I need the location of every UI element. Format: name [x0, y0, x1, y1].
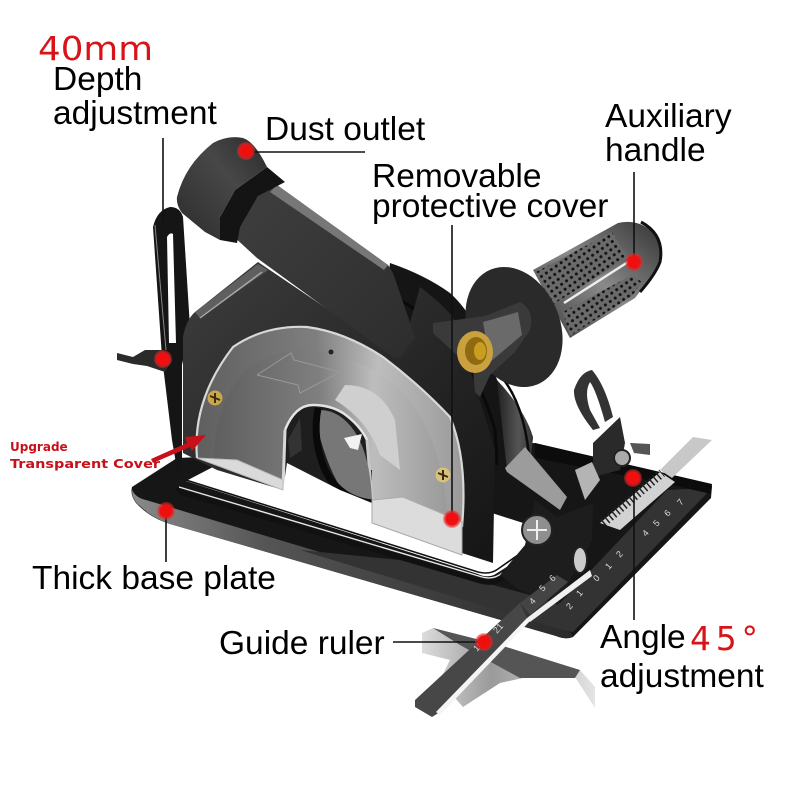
steel slider	[505, 447, 567, 510]
ruler numbers: 7	[675, 497, 686, 507]
ruler numbers: 21	[491, 621, 505, 635]
label: auxiliary handle: Auxiliary	[605, 98, 732, 135]
inner wheel ring	[318, 410, 372, 500]
label: dust outlet: Dust outlet	[265, 111, 426, 148]
label: thick base plate: Thick base plate	[32, 560, 276, 597]
label: angle adjustment: Angle	[600, 619, 686, 656]
auxiliary handle	[433, 222, 662, 402]
label: angle adjustment: adjustment	[600, 658, 765, 695]
label: depth adjustment: adjustment	[53, 95, 218, 132]
label: removable protective cover: Removable	[372, 158, 541, 195]
label: 45 degrees: 45°	[690, 619, 758, 658]
transparent cover	[196, 327, 463, 555]
ruler numbers: 6	[662, 508, 673, 518]
protective cover housing	[183, 262, 495, 563]
label: upgrade transparent cover: Transparent Cover	[10, 457, 160, 471]
dust outlet tube	[177, 137, 415, 358]
ruler numbers: 5	[537, 583, 548, 593]
white opening in the base frame	[186, 455, 545, 576]
label: upgrade transparent cover: Upgrade	[10, 440, 68, 454]
rear housing	[380, 263, 533, 480]
ruler numbers: 10	[471, 639, 485, 653]
red arrow: upgrade transparent cover	[151, 435, 206, 463]
angle adjustment mechanism	[500, 370, 650, 605]
guide ruler and foot	[415, 437, 712, 717]
ruler numbers: 1	[574, 588, 585, 598]
ruler numbers: 2	[614, 549, 625, 559]
label: removable protective cover: protective cover	[372, 188, 608, 225]
label: 40mm: 40mm	[38, 29, 153, 68]
ruler numbers: 0	[591, 573, 602, 583]
leader lines	[163, 138, 634, 642]
ruler numbers: 4	[640, 528, 651, 538]
label: guide ruler: Guide ruler	[219, 625, 385, 662]
ruler numbers: 6	[547, 573, 558, 583]
window arch	[283, 405, 372, 523]
printed arrow	[257, 353, 340, 393]
base plate	[132, 443, 712, 638]
ruler numbers: 2	[564, 601, 575, 611]
ruler numbers: 5	[651, 518, 662, 528]
white below arch	[283, 463, 372, 530]
ruler numbers: 1	[603, 561, 614, 571]
ruler numbers	[471, 497, 686, 653]
label: depth adjustment: Depth	[53, 61, 142, 98]
clear cover tips	[197, 458, 283, 490]
depth adjustment bracket	[117, 207, 190, 475]
red callout dots	[154, 142, 643, 651]
label: auxiliary handle: handle	[605, 132, 706, 169]
brass screws	[208, 390, 450, 482]
ruler numbers: 4	[527, 596, 538, 606]
